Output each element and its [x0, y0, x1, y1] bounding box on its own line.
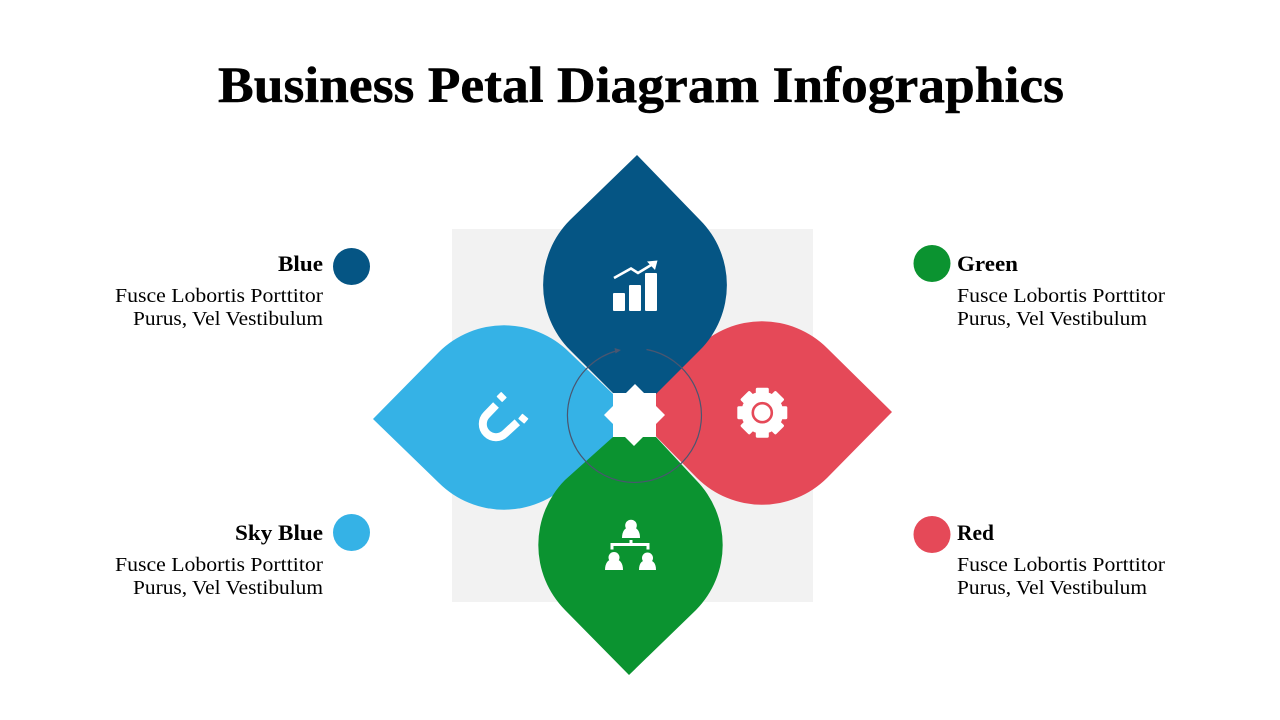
petal: sky blue	[373, 325, 635, 510]
legend: Sky Blue: Purus, Vel Vestibulum	[133, 577, 323, 599]
legend: Green: Purus, Vel Vestibulum	[957, 308, 1147, 330]
legend: Blue	[115, 248, 370, 330]
icon: magnet	[483, 392, 529, 437]
legend: Red: Red	[957, 520, 994, 545]
legend: Red	[914, 516, 1165, 599]
title: Business Petal Diagram Infographics	[218, 58, 1064, 114]
legend: Red: Fusce Lobortis Porttitor	[957, 554, 1165, 576]
petal: green	[538, 437, 723, 675]
legend: Sky Blue	[115, 514, 370, 599]
icon: growth chart	[613, 260, 658, 311]
legend: Blue: Fusce Lobortis Porttitor	[115, 285, 323, 307]
legend: Sky Blue: Sky Blue	[235, 520, 323, 545]
legend: Green	[914, 245, 1165, 330]
legend: Red: Purus, Vel Vestibulum	[957, 577, 1147, 599]
legend: Green: Green	[957, 251, 1018, 276]
legend: Blue: Purus, Vel Vestibulum	[133, 308, 323, 330]
petal: dark blue	[543, 155, 727, 415]
icon: team hierarchy	[605, 520, 656, 570]
panel: grey backdrop	[452, 229, 813, 602]
center star	[604, 384, 665, 446]
cycle ring with arrow	[567, 348, 701, 482]
legend: Blue: Blue	[278, 251, 323, 276]
icon: gear	[737, 388, 787, 438]
petal: red	[635, 321, 892, 505]
legend: Sky Blue: Fusce Lobortis Porttitor	[115, 554, 323, 576]
legend: Green: Fusce Lobortis Porttitor	[957, 285, 1165, 307]
